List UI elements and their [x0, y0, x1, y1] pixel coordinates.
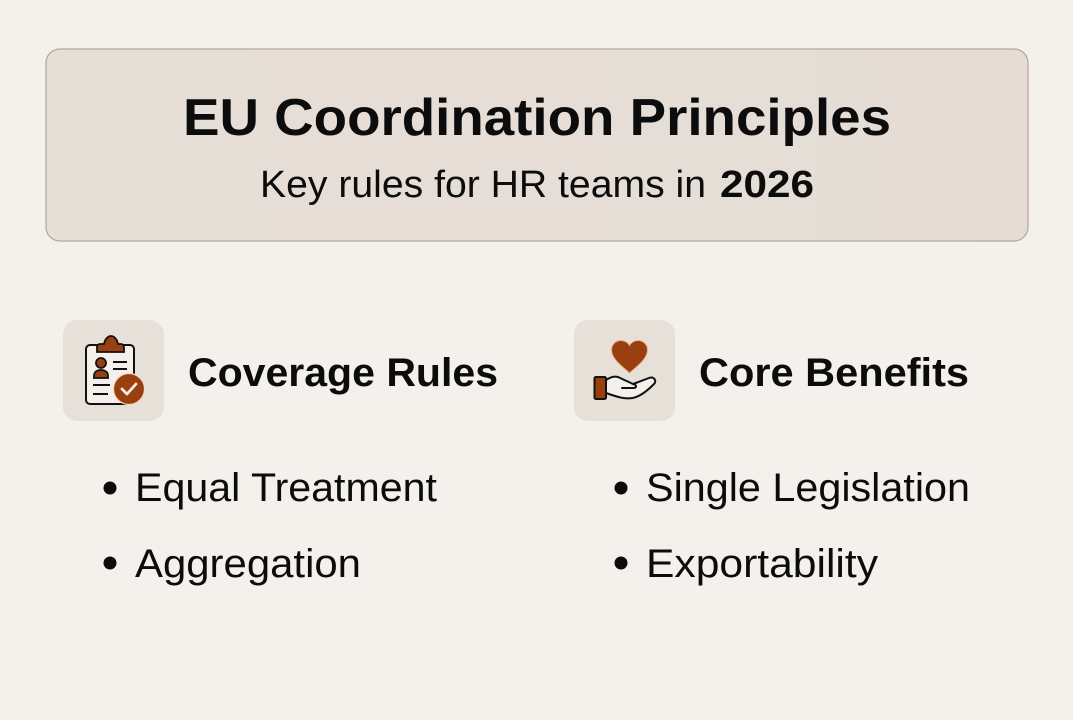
list: core benefits: Single Legislation	[646, 466, 970, 510]
heading: coverage rules: Coverage Rules	[188, 351, 498, 395]
list: core benefits: Exportability	[646, 542, 878, 586]
subtitle: Key rules for HR teams in	[260, 164, 706, 206]
subtitle: 2026	[720, 164, 814, 206]
panel: core benefits	[574, 320, 970, 586]
heading: core benefits: Core Benefits	[699, 351, 969, 395]
panel: coverage rules	[63, 320, 498, 586]
title: EU Coordination Principles	[183, 89, 891, 147]
icon: hand holding heart	[574, 320, 675, 421]
panel: header	[46, 49, 1028, 241]
list: coverage rules: Aggregation	[135, 542, 361, 586]
icon: clipboard with person and check	[63, 320, 164, 421]
list: coverage rules: Equal Treatment	[135, 466, 437, 510]
list: coverage rules	[104, 466, 437, 586]
list: core benefits	[614, 466, 970, 586]
